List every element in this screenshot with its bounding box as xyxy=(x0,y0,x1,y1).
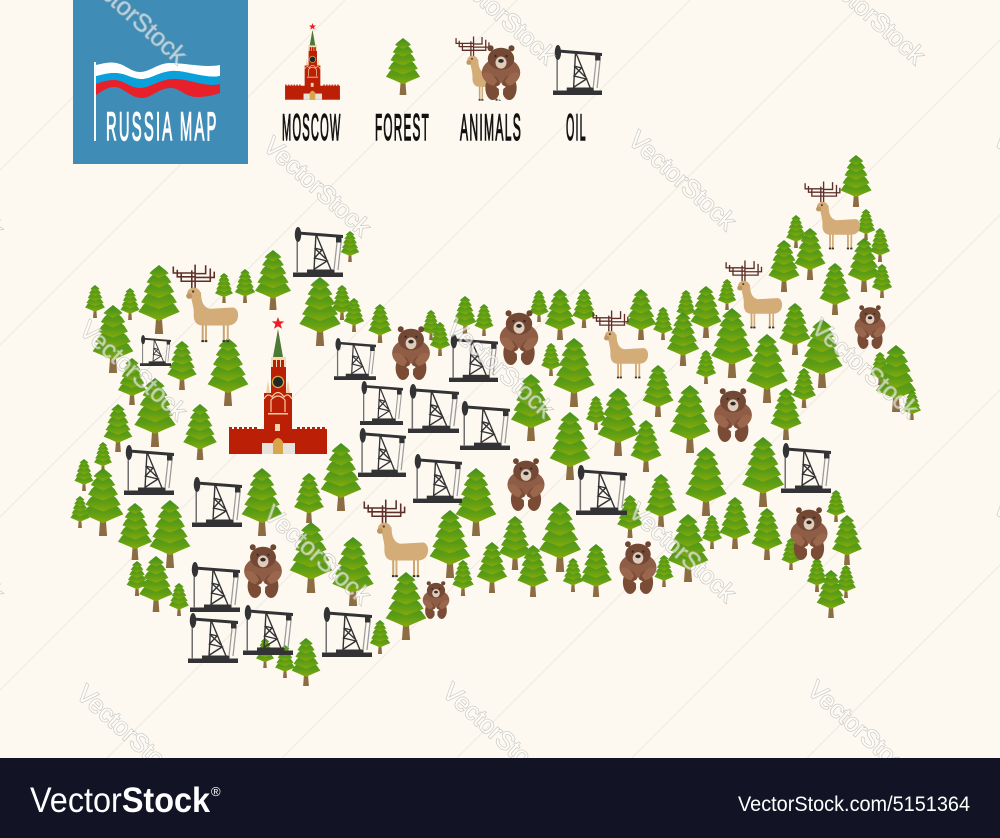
trees: western region xyxy=(70,231,392,686)
legend: Animals xyxy=(456,37,522,148)
icon: tree xyxy=(386,38,420,95)
logo: VectorStock: VectorStock xyxy=(30,781,210,820)
deer xyxy=(173,182,860,577)
label: Animals: ANIMALS xyxy=(460,106,522,148)
icon: Kremlin tower xyxy=(283,23,340,100)
legend: Forest xyxy=(375,38,430,148)
watermarks: VectorStock xyxy=(258,500,376,610)
watermarks: VectorStock xyxy=(623,498,741,608)
watermarks: VectorStock xyxy=(623,126,741,236)
icon: flag pole xyxy=(94,62,96,141)
map of Russia made of icons xyxy=(70,155,921,686)
image id: VectorStock.com/5151364 xyxy=(738,793,970,816)
icon: deer xyxy=(456,37,508,101)
watermarks: VectorStock xyxy=(441,314,559,424)
bears xyxy=(244,305,885,619)
legend: Moscow xyxy=(282,23,342,148)
logo: registered mark: ® xyxy=(211,784,221,799)
oil pumps xyxy=(124,227,831,663)
label: Forest: FOREST xyxy=(375,106,430,148)
watermarks: VectorStock xyxy=(806,314,924,424)
trees: central region xyxy=(242,289,612,654)
icon: bear xyxy=(482,45,520,100)
heading: Russia Map: RUSSIA MAP xyxy=(106,106,219,149)
icon: Russian flag xyxy=(96,62,220,98)
watermarks: VectorStock xyxy=(258,132,376,242)
label: Oil: OIL xyxy=(566,106,587,148)
watermarks: VectorStock xyxy=(802,676,920,786)
title panel: Russia Map xyxy=(73,0,248,164)
watermarks: VectorStock xyxy=(74,316,192,426)
label: Moscow: MOSCOW xyxy=(282,106,342,148)
legend: Oil xyxy=(553,45,602,148)
trees: eastern region xyxy=(598,155,921,618)
watermarks: VectorStock xyxy=(71,680,189,790)
icon: oil pump xyxy=(553,45,602,95)
watermarks: VectorStock xyxy=(437,678,555,788)
footer bar xyxy=(0,758,1000,838)
icon: Kremlin Spasskaya tower (Moscow) xyxy=(226,317,327,454)
